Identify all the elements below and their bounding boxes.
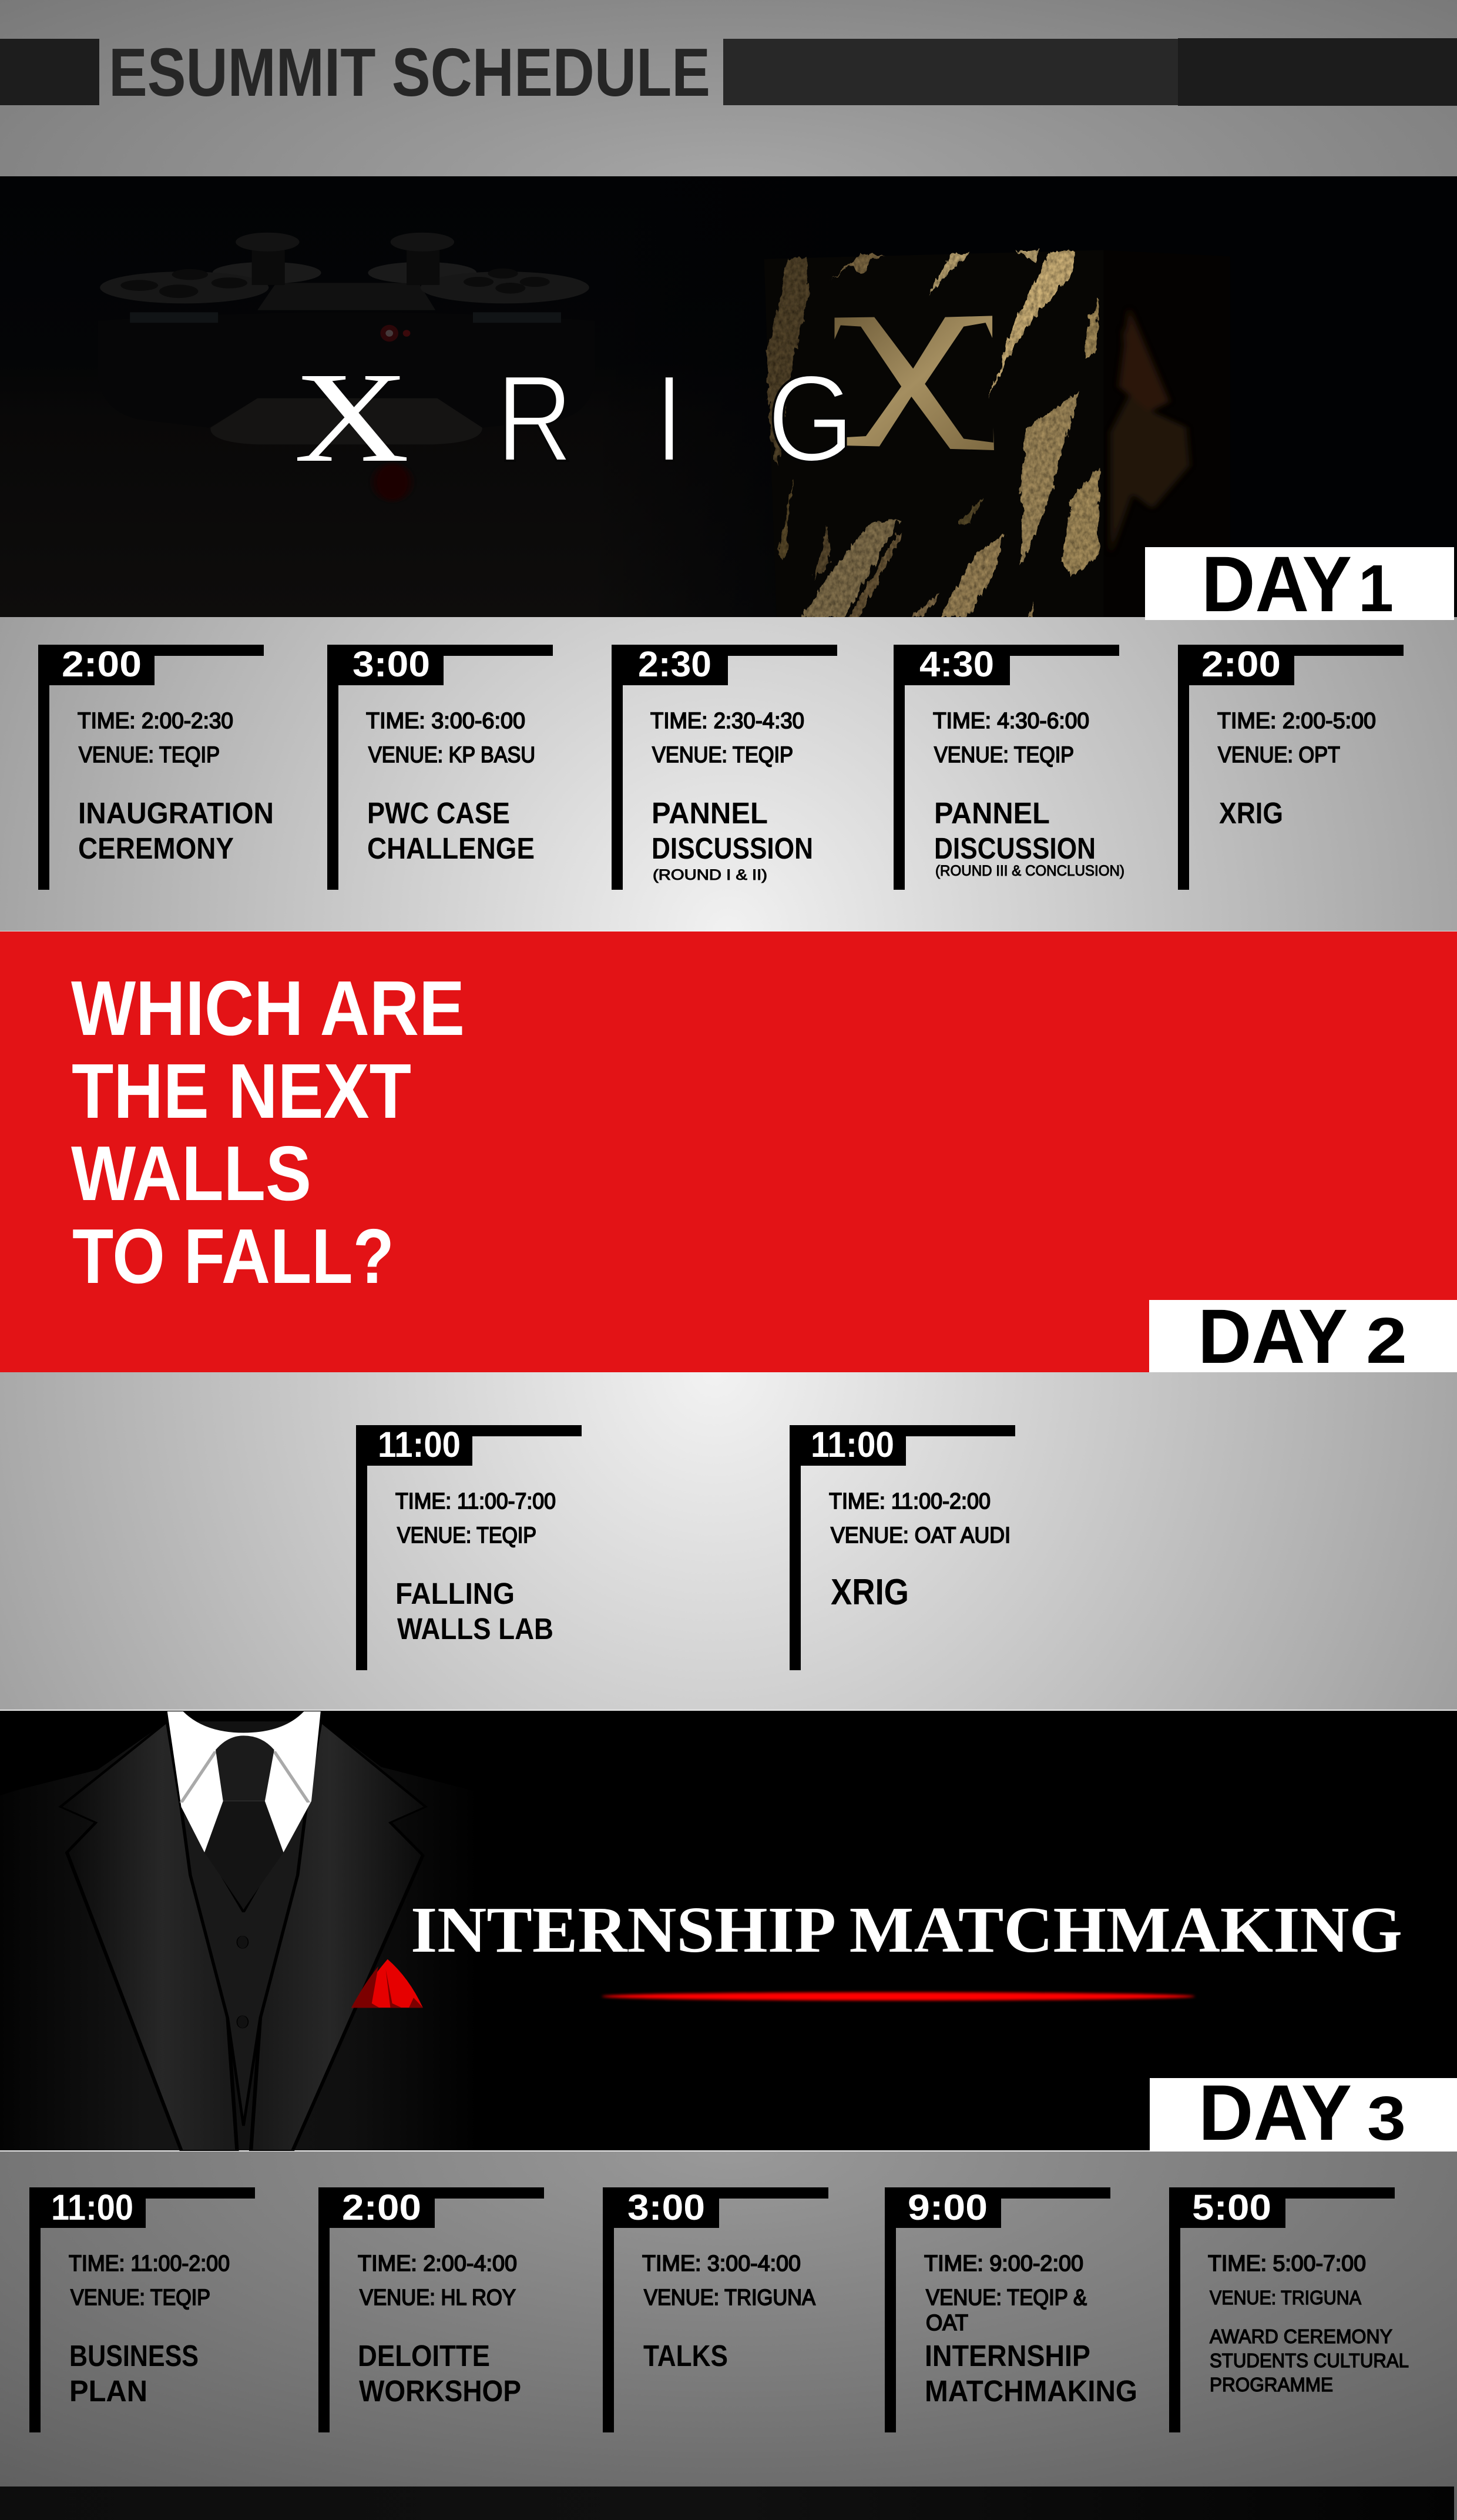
card: deloitte workshop: WORKSHOP (359, 2374, 521, 2408)
card: talks: 3:00 (627, 2187, 705, 2227)
card: deloitte workshop (318, 2187, 544, 2432)
image: suit (0, 1711, 492, 2150)
card: internship matchmaking (885, 2187, 1137, 2432)
image: game controller (98, 233, 595, 501)
label: DAY 3: DAY (1198, 2069, 1352, 2157)
image: gold-leaf box (764, 250, 1230, 618)
card: award ceremony and cultural programme: STUDENTS CULTURAL (1210, 2350, 1409, 2371)
card: xrig day 1: TIME: 2:00-5:00 (1217, 709, 1376, 733)
label: DAY 1: 1 (1358, 551, 1394, 625)
card: award ceremony and cultural programme (1169, 2187, 1409, 2432)
card: internship matchmaking: OAT (926, 2311, 968, 2335)
card: inauguration: TIME: 2:00-2:30 (78, 709, 233, 733)
card: business plan: 11:00 (51, 2187, 133, 2227)
card: pwc case challenge: CHALLENGE (367, 832, 535, 865)
title: ESUMMIT SCHEDULE (109, 34, 710, 110)
XRIG wordmark: R (496, 350, 573, 487)
XRIG wordmark: G (767, 350, 854, 487)
card: panel discussion round 3: 4:30 (919, 644, 994, 684)
headline: WALLS (71, 1130, 311, 1217)
label: DAY 3: 3 (1367, 2084, 1406, 2153)
card: pwc case challenge: VENUE: KP BASU (368, 743, 535, 768)
card: pwc case challenge: TIME: 3:00-6:00 (366, 709, 525, 733)
card: xrig day 2: XRIG (831, 1572, 909, 1613)
heading: internship matchmaking: INTERNSHIP MATCHMAKING (411, 1894, 1402, 1966)
card: inauguration: INAUGRATION (78, 796, 274, 830)
card: pwc case challenge: 3:00 (352, 644, 430, 684)
card: panel discussion rounds 1 and 2: DISCUSSION (652, 832, 813, 865)
card: xrig day 1: XRIG (1219, 796, 1283, 830)
card: panel discussion rounds 1 and 2: VENUE: TEQIP (652, 743, 793, 768)
day 1 schedule panel background (0, 617, 1457, 931)
label: DAY 1: DAY (1201, 541, 1352, 628)
card: business plan: BUSINESS (69, 2339, 199, 2372)
card: xrig day 2: TIME: 11:00-2:00 (829, 1489, 991, 1514)
card: panel discussion round 3: PANNEL (934, 796, 1050, 830)
box logo mark (834, 316, 994, 450)
label: DAY 3 (1150, 2069, 1457, 2157)
card: xrig day 2: VENUE: OAT AUDI (831, 1523, 1010, 1548)
card: business plan: VENUE: TEQIP (70, 2286, 210, 2310)
card: inauguration: 2:00 (62, 644, 142, 684)
card: falling walls lab: TIME: 11:00-7:00 (395, 1489, 556, 1514)
card: xrig day 1: VENUE: OPT (1218, 743, 1340, 768)
card: internship matchmaking: VENUE: TEQIP & (926, 2286, 1087, 2310)
card: pwc case challenge (327, 644, 553, 890)
headline (71, 965, 465, 1299)
card: pwc case challenge: PWC CASE (367, 796, 510, 830)
label: DAY 2 (1149, 1293, 1457, 1379)
card: falling walls lab (356, 1425, 582, 1670)
card: talks: VENUE: TRIGUNA (644, 2286, 816, 2310)
card: internship matchmaking: MATCHMAKING (925, 2374, 1137, 2408)
XRIG wordmark: I (656, 350, 683, 487)
red underline (602, 1992, 1195, 2000)
card: panel discussion rounds 1 and 2: PANNEL (652, 796, 768, 830)
hero panel: internship matchmaking (0, 1710, 1457, 2152)
card: deloitte workshop: VENUE: HL ROY (360, 2286, 516, 2310)
card: inauguration: VENUE: TEQIP (79, 743, 220, 768)
card: xrig day 1 (1178, 644, 1404, 890)
card: panel discussion round 3: VENUE: TEQIP (934, 743, 1074, 768)
card: falling walls lab: VENUE: TEQIP (397, 1523, 536, 1548)
card: business plan: TIME: 11:00-2:00 (69, 2251, 230, 2276)
card: talks: TIME: 3:00-4:00 (642, 2251, 801, 2276)
card: inauguration (38, 644, 274, 890)
card: falling walls lab: 11:00 (378, 1425, 461, 1465)
headline: THE NEXT (72, 1048, 411, 1134)
card: talks (603, 2187, 828, 2432)
card: falling walls lab: WALLS LAB (397, 1612, 553, 1646)
card: award ceremony and cultural programme: PROGRAMME (1210, 2374, 1333, 2395)
headline: WHICH ARE (71, 965, 465, 1051)
card: panel discussion rounds 1 and 2: TIME: 2:30-4:30 (650, 709, 804, 733)
card: award ceremony and cultural programme: TIME: 5:00-7:00 (1208, 2251, 1366, 2276)
card: award ceremony and cultural programme: VENUE: TRIGUNA (1210, 2287, 1361, 2308)
card: inauguration: CEREMONY (78, 832, 234, 865)
card: xrig day 2 (790, 1425, 1015, 1670)
headline: TO FALL? (72, 1213, 394, 1299)
card: panel discussion rounds 1 and 2 (612, 644, 837, 890)
card: panel discussion rounds 1 and 2: (ROUND I & II) (653, 867, 767, 883)
hero panel: XRIG (0, 176, 1457, 618)
red panel: falling walls (0, 931, 1457, 1372)
icon: red pocket square (351, 1959, 423, 2008)
card: award ceremony and cultural programme: AWARD CEREMONY (1210, 2325, 1392, 2347)
card: deloitte workshop: DELOITTE (358, 2339, 490, 2372)
card: award ceremony and cultural programme: 5:00 (1192, 2187, 1271, 2227)
card: panel discussion round 3: DISCUSSION (934, 832, 1096, 865)
card: panel discussion rounds 1 and 2: 2:30 (638, 644, 711, 684)
XRIG wordmark (294, 346, 854, 489)
card: falling walls lab: FALLING (395, 1577, 515, 1610)
card: deloitte workshop: TIME: 2:00-4:00 (358, 2251, 517, 2276)
label: DAY 1 (1145, 541, 1454, 628)
day 2 schedule panel background (0, 1372, 1457, 1710)
header: title bar (0, 34, 1457, 110)
XRIG wordmark: X (294, 346, 409, 489)
card: business plan (29, 2187, 255, 2432)
label: DAY 2: DAY (1198, 1293, 1348, 1379)
card: panel discussion round 3: (ROUND III & CONCLUSION) (935, 863, 1124, 879)
card: xrig day 1: 2:00 (1201, 644, 1281, 684)
card: deloitte workshop: 2:00 (342, 2187, 421, 2227)
card: business plan: PLAN (69, 2374, 147, 2408)
footer bar (0, 2487, 1454, 2520)
card: panel discussion round 3 (894, 644, 1124, 890)
card: internship matchmaking: TIME: 9:00-2:00 (924, 2251, 1083, 2276)
card: internship matchmaking: INTERNSHIP (925, 2339, 1090, 2372)
card: talks: TALKS (643, 2339, 728, 2372)
card: panel discussion round 3: TIME: 4:30-6:00 (933, 709, 1089, 733)
label: DAY 2: 2 (1366, 1305, 1407, 1377)
card: xrig day 2: 11:00 (811, 1425, 894, 1465)
day 3 schedule panel background (0, 2152, 1457, 2520)
header band background (0, 0, 1457, 176)
card: internship matchmaking: 9:00 (908, 2187, 988, 2227)
